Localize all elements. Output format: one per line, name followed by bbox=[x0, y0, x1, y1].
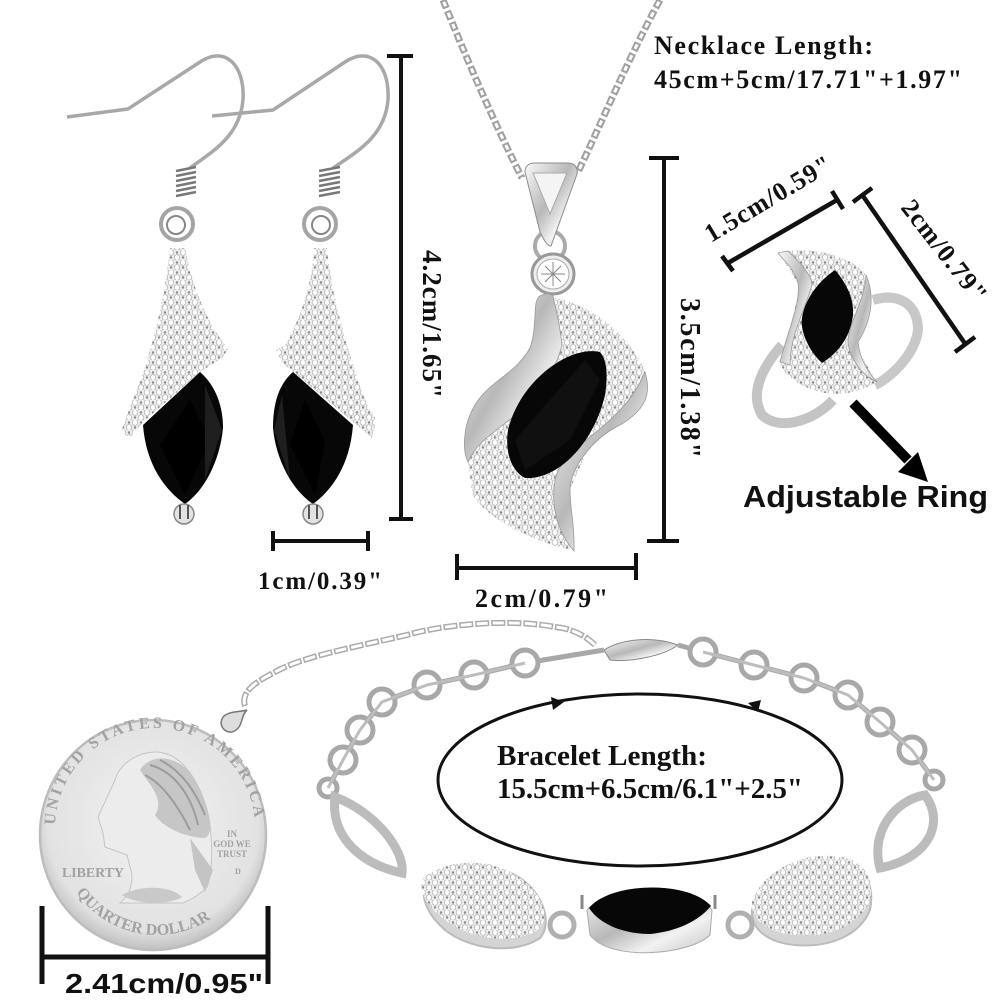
bracelet length label bbox=[497, 741, 803, 805]
dimension: coin width: 2.41cm/0.95" bbox=[65, 968, 263, 999]
ring bbox=[757, 250, 918, 423]
bracelet chain bbox=[319, 639, 943, 797]
dimension: pendant height bbox=[647, 158, 705, 541]
necklace length label: Necklace Length: bbox=[654, 31, 873, 60]
dimension: earring height bbox=[387, 56, 447, 519]
quarter coin: GOD WE bbox=[213, 839, 251, 849]
bracelet length label: 15.5cm+6.5cm/6.1"+2.5" bbox=[497, 774, 803, 805]
quarter coin: UNITED STATES OF AMERICA bbox=[44, 717, 264, 824]
dimension: ring width: 1.5cm/0.59" bbox=[699, 150, 837, 248]
bracelet centrepiece bbox=[421, 856, 871, 953]
quarter coin: IN bbox=[227, 829, 237, 839]
dimension: pendant height: 3.5cm/1.38" bbox=[674, 298, 705, 458]
bracelet marquise links bbox=[335, 795, 934, 873]
dimension: earring height: 4.2cm/1.65" bbox=[417, 250, 447, 398]
quarter coin: TRUST bbox=[217, 849, 247, 859]
dimension: coin width bbox=[42, 906, 268, 999]
bracelet length label: Bracelet Length: bbox=[497, 741, 707, 772]
necklace chain bbox=[443, 0, 660, 178]
quarter coin: LIBERTY bbox=[62, 866, 124, 881]
quarter coin bbox=[38, 717, 268, 952]
dimension: ring length: 2cm/0.79" bbox=[895, 194, 993, 308]
bracelet extender chain bbox=[221, 623, 678, 732]
necklace length label bbox=[654, 31, 962, 94]
arrow to adjustable ring bbox=[853, 403, 928, 482]
quarter coin: D bbox=[235, 867, 241, 876]
adjustable ring label: Adjustable Ring bbox=[743, 479, 988, 514]
dimension: pendant width bbox=[457, 553, 636, 613]
dimension: pendant width: 2cm/0.79" bbox=[475, 584, 608, 613]
quarter coin: QUARTER DOLLAR bbox=[78, 888, 211, 935]
dimension: earring width bbox=[258, 531, 382, 595]
pendant bbox=[464, 163, 648, 551]
dimension: ring length bbox=[853, 188, 993, 352]
dimension: earring width: 1cm/0.39" bbox=[258, 568, 382, 595]
right earring bbox=[212, 56, 388, 524]
bracelet length oval bbox=[438, 694, 842, 866]
necklace length label: 45cm+5cm/17.71"+1.97" bbox=[654, 65, 962, 94]
left earring bbox=[67, 56, 243, 524]
